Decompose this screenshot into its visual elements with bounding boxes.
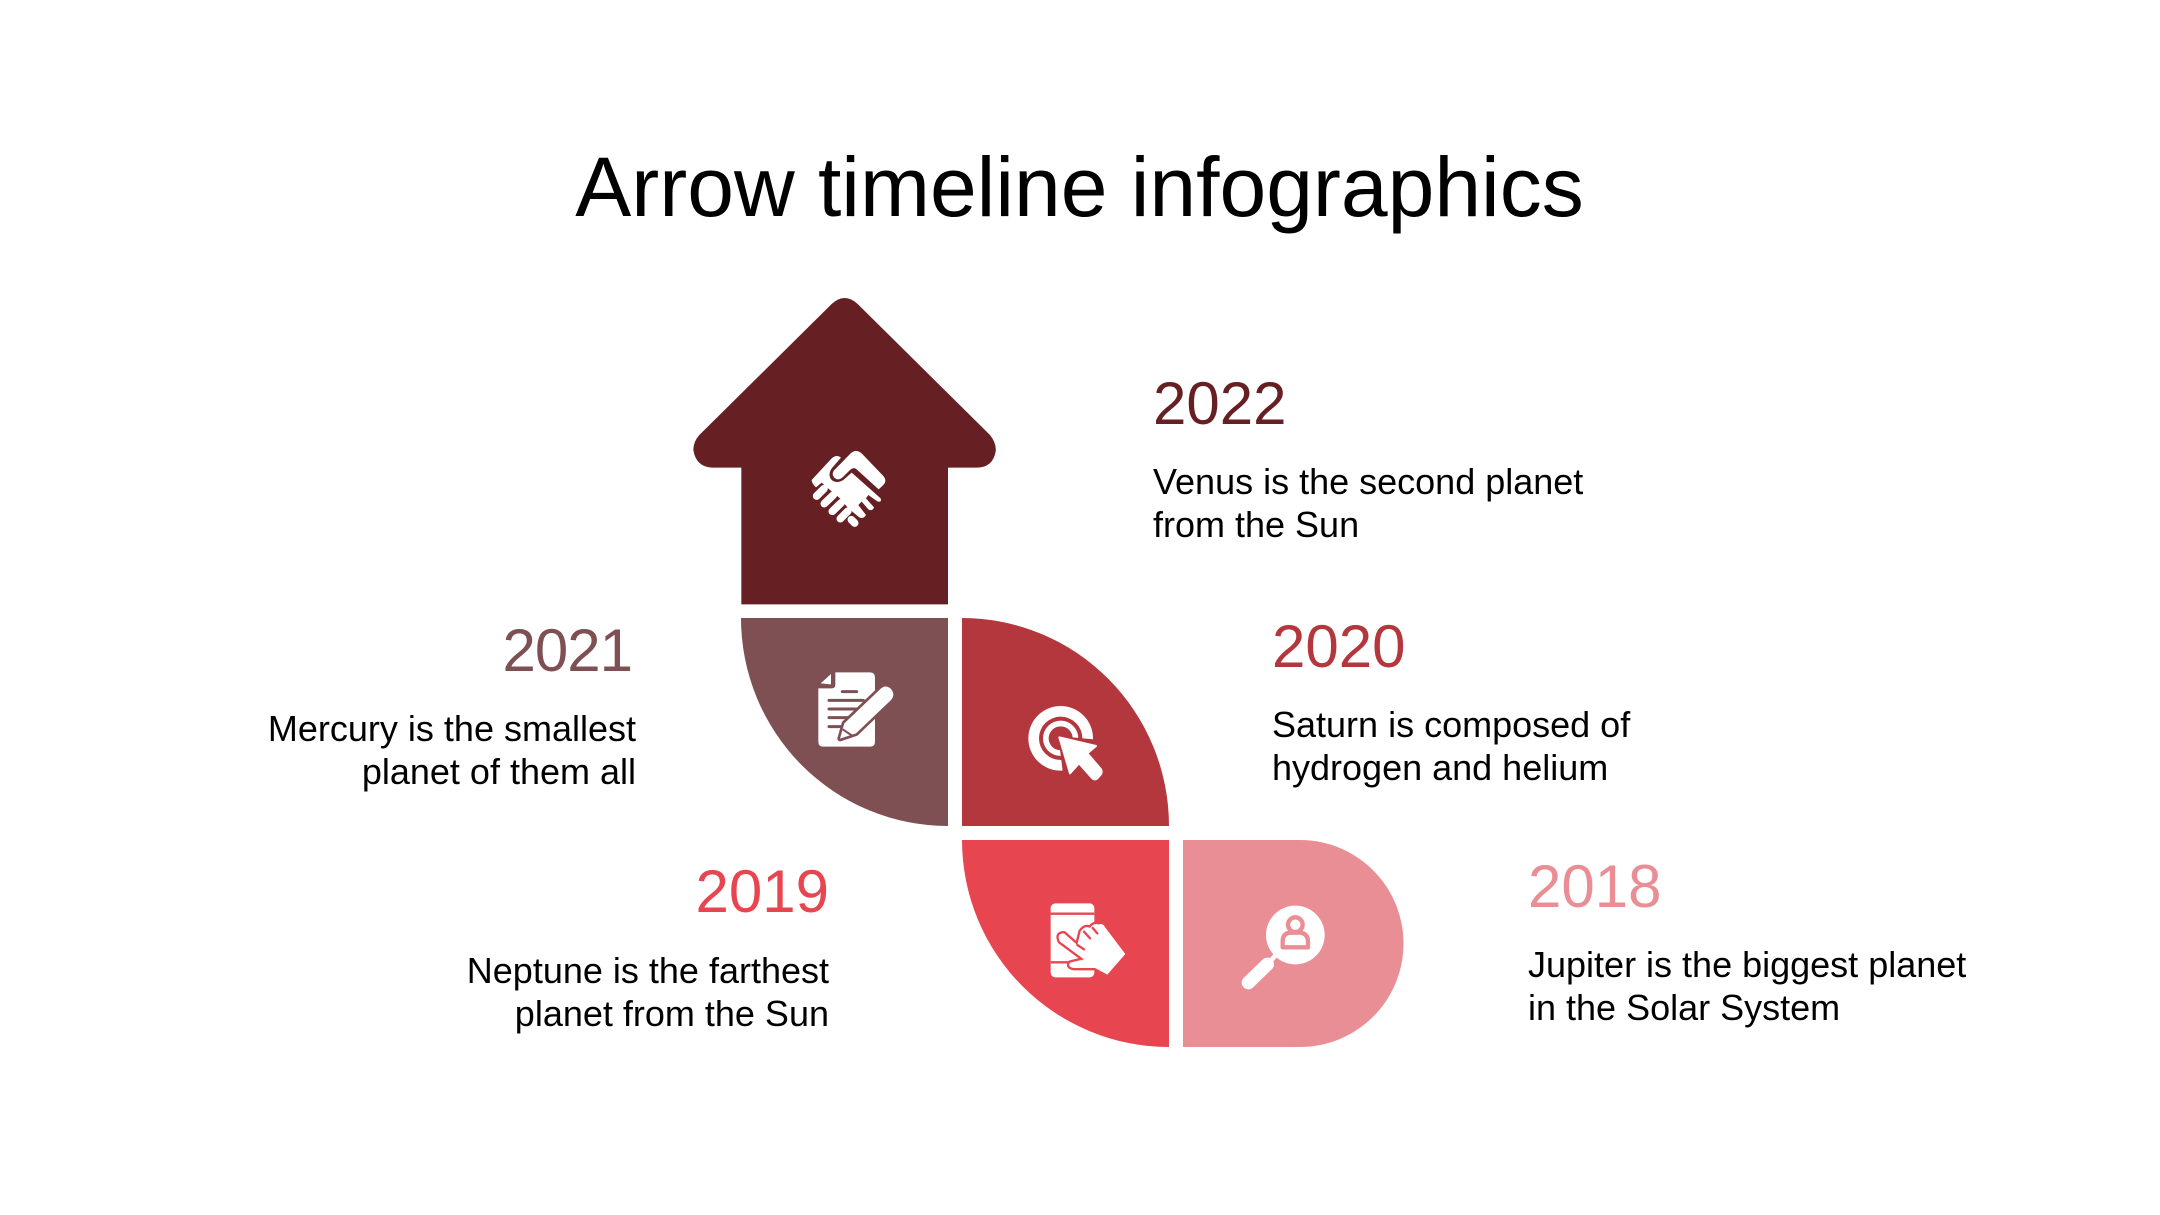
text block: 2021: 2021: [503, 617, 632, 684]
text block: 2019: Neptune is the farthest: [467, 950, 829, 991]
text block: 2020: 2020: [1272, 613, 1405, 680]
panel: 2019 quarter segment: [962, 840, 1169, 1047]
text block: 2022: 2022: [1153, 370, 1286, 437]
text block: 2018: 2018: [1528, 853, 1661, 920]
icon: handshake: [812, 451, 885, 523]
text block: 2020: Saturn is composed of: [1272, 704, 1631, 745]
text block: 2021: [268, 617, 636, 792]
icon: target with cursor: [1028, 706, 1107, 782]
icon: phone with tapping hand: [1051, 903, 1125, 977]
panel: 2018 start segment: [1183, 840, 1404, 1047]
text block: 2020: hydrogen and helium: [1272, 747, 1608, 788]
panel: 2022 arrow head segment: [693, 298, 996, 604]
text block: 2021: Mercury is the smallest: [268, 708, 636, 749]
text block: 2019: [467, 858, 829, 1034]
text block: 2022: [1153, 370, 1583, 545]
icon: document and pencil: [818, 672, 893, 747]
text block: 2021: planet of them all: [362, 751, 636, 792]
text block: 2022: from the Sun: [1153, 504, 1359, 545]
text block: 2018: Jupiter is the biggest planet: [1528, 944, 1966, 985]
panel: 2021 quarter segment: [741, 618, 948, 826]
text block: 2019: planet from the Sun: [515, 993, 829, 1034]
text block: 2020: [1272, 613, 1631, 788]
icon: magnifier with person: [1248, 906, 1325, 983]
text block: 2022: Venus is the second planet: [1153, 461, 1583, 502]
text block: 2018: in the Solar System: [1528, 987, 1840, 1028]
panel: 2020 quarter segment: [962, 618, 1169, 826]
text block: 2019: 2019: [696, 858, 829, 925]
text block: 2018: [1528, 853, 1966, 1028]
title: Arrow timeline infographics: [575, 140, 1584, 234]
